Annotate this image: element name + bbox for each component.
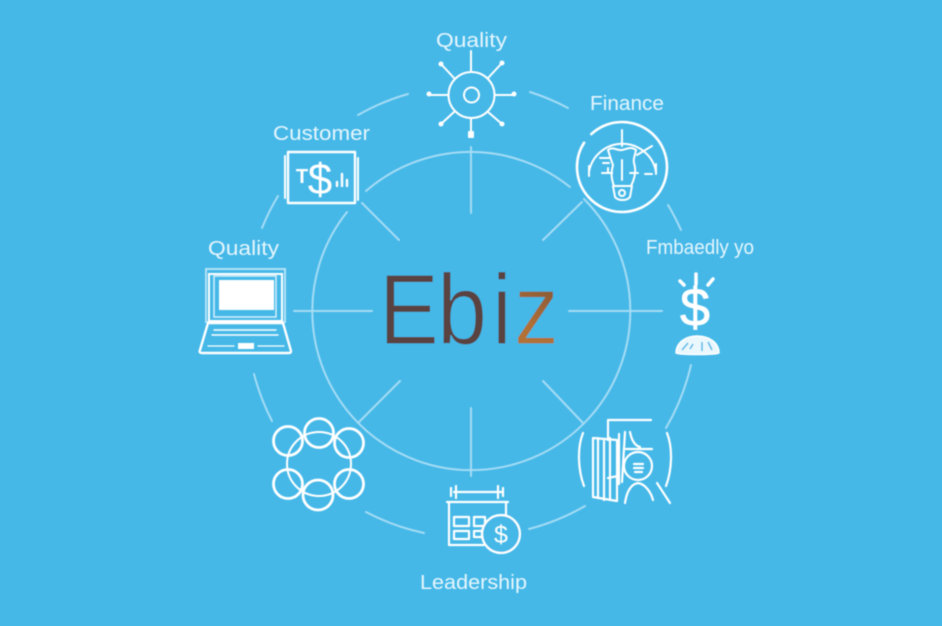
icon: quality sunburst bbox=[428, 51, 516, 137]
icon: finance light bulb gauge bbox=[558, 103, 686, 231]
central title: Ebiz: E bbox=[379, 255, 439, 366]
label: Customer: Customer bbox=[273, 123, 370, 145]
central title: Ebiz: z bbox=[514, 255, 559, 366]
icon: laptop bbox=[200, 269, 291, 353]
label: Finance: Finance bbox=[590, 93, 664, 115]
label: Quality top: Quality bbox=[436, 30, 507, 52]
icon: customer dollar card: T bbox=[296, 166, 308, 188]
icon: customer dollar card bbox=[285, 152, 358, 204]
icon: person with books bbox=[579, 420, 671, 503]
icon: dollar with rays on dome bbox=[676, 274, 719, 354]
icon: customer dollar card: $ bbox=[308, 155, 332, 204]
icon: ring of linked circles bbox=[274, 418, 364, 510]
label: Leadership: Leadership bbox=[420, 572, 527, 594]
outer ring arcs bbox=[254, 92, 691, 533]
label: Quality left: Quality bbox=[208, 238, 279, 260]
label: garbled heading right: Fmbaedly yo bbox=[646, 237, 754, 259]
central title: Ebiz: b bbox=[437, 255, 487, 366]
icon: dollar with rays on dome: $ bbox=[680, 278, 710, 338]
central title: Ebiz: i bbox=[492, 255, 512, 366]
icon: calendar with dollar coin bbox=[447, 486, 520, 553]
coin dollar sign: $ bbox=[494, 521, 508, 549]
hub structure: inner circle and spokes bbox=[294, 147, 662, 476]
